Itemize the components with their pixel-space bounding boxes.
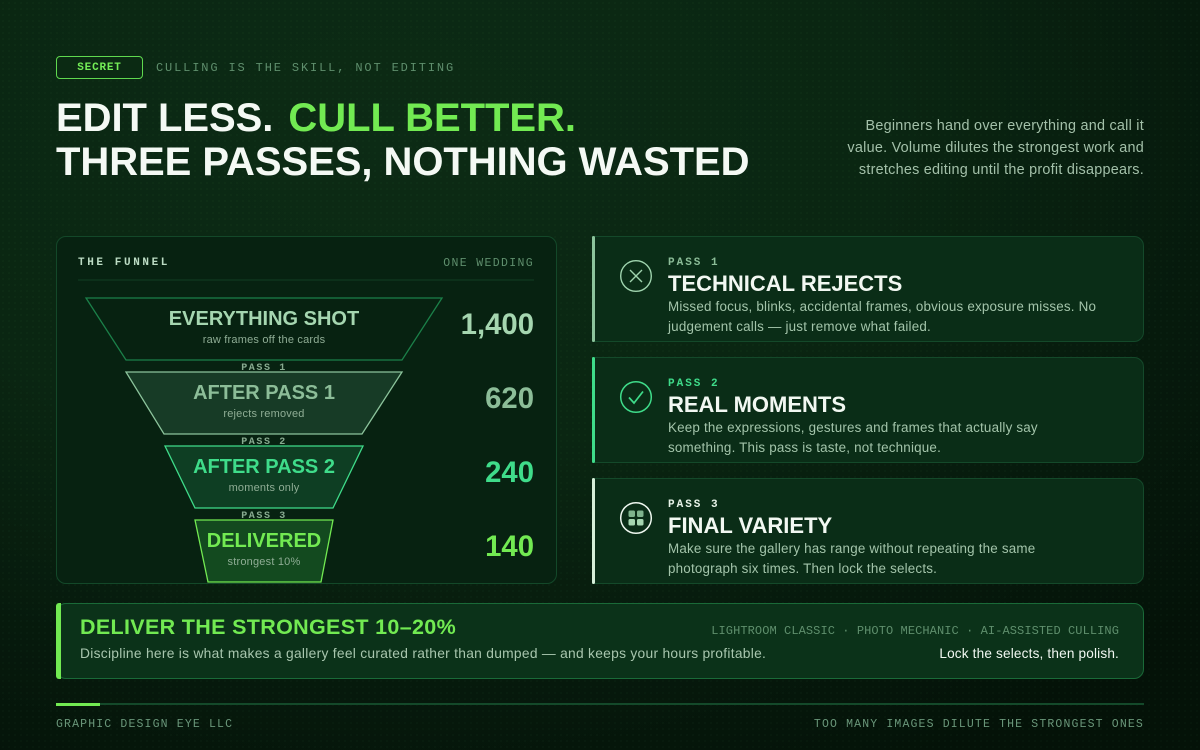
icon: check circle	[620, 381, 652, 413]
intro text: Beginners hand over everything and call it	[866, 118, 1144, 134]
card text: judgement calls — just remove what failed.	[668, 319, 931, 334]
callout text: Discipline here is what makes a gallery feel curated rather than dumped — and keeps your hours profitable.	[80, 646, 766, 661]
stage 3: moments only	[229, 482, 299, 494]
panel sublabel: ONE WEDDING	[443, 257, 534, 270]
count 620: 620	[485, 382, 534, 415]
card heading: TECHNICAL REJECTS	[668, 271, 902, 296]
title: EDIT LESS. CULL BETTER.	[56, 96, 576, 140]
panel: funnel	[56, 236, 557, 584]
callout banner	[56, 603, 1144, 679]
count 1400: 1,400	[461, 308, 534, 341]
count 140: 140	[485, 530, 534, 563]
card text: something. This pass is taste, not technique.	[668, 440, 941, 455]
stage 3: AFTER PASS 2	[193, 456, 335, 478]
callout heading: DELIVER THE STRONGEST 10–20%	[80, 615, 456, 639]
funnel chart shapes	[78, 280, 534, 583]
closing line: Lock the selects, then polish.	[939, 646, 1119, 661]
pass label: PASS 1	[668, 256, 720, 268]
icon: grid circle	[620, 502, 652, 534]
card text: Make sure the gallery has range without repeating the same	[668, 541, 1035, 556]
stage 4: strongest 10%	[228, 556, 300, 568]
panel label: THE FUNNEL	[78, 257, 170, 269]
card text: Missed focus, blinks, accidental frames, obvious exposure misses. No	[668, 299, 1096, 314]
stage 3	[193, 456, 335, 494]
pass label: PASS 2	[668, 378, 720, 390]
intro text: value. Volume dilutes the strongest work and	[847, 140, 1144, 156]
stage 4: DELIVERED	[207, 530, 321, 552]
title	[56, 96, 749, 184]
stage 1: EVERYTHING SHOT	[169, 308, 359, 330]
stage 1	[169, 308, 359, 346]
pass 1 label: PASS 1	[241, 363, 287, 374]
pass label: PASS 3	[668, 498, 720, 510]
intro text: stretches editing until the profit disappears.	[859, 162, 1144, 178]
count 240: 240	[485, 456, 534, 489]
eyebrow: CULLING IS THE SKILL, NOT EDITING	[156, 61, 455, 75]
card text: Keep the expressions, gestures and frames that actually say	[668, 420, 1038, 435]
intro text	[847, 118, 1144, 178]
icon: x circle	[620, 260, 652, 292]
card heading: REAL MOMENTS	[668, 392, 846, 417]
stage 2: AFTER PASS 1	[193, 382, 335, 404]
card: pass 3	[592, 478, 1144, 584]
card: pass 2	[592, 357, 1144, 463]
stage 2: rejects removed	[223, 408, 305, 420]
stage 4	[207, 530, 321, 568]
footer rule	[56, 703, 1144, 705]
card text	[668, 420, 1038, 455]
card text: photograph six times. Then lock the selects.	[668, 561, 937, 576]
stage 2	[193, 382, 335, 420]
badge: secret: SECRET	[77, 62, 122, 74]
stage 1: raw frames off the cards	[203, 334, 325, 346]
pass 2 label: PASS 2	[241, 437, 287, 448]
tools list: LIGHTROOM CLASSIC · PHOTO MECHANIC · AI-ASSISTED CULLING	[711, 624, 1119, 638]
card text	[668, 299, 1096, 334]
title: THREE PASSES, NOTHING WASTED	[56, 140, 749, 184]
pass 3 label: PASS 3	[241, 511, 287, 522]
footer right: TOO MANY IMAGES DILUTE THE STRONGEST ONES	[814, 718, 1144, 731]
badge: secret	[56, 56, 143, 79]
accent bar	[56, 603, 61, 679]
card heading: FINAL VARIETY	[668, 513, 832, 538]
card: pass 1	[592, 236, 1144, 342]
card text	[668, 541, 1035, 576]
footer left: GRAPHIC DESIGN EYE LLC	[56, 718, 233, 731]
